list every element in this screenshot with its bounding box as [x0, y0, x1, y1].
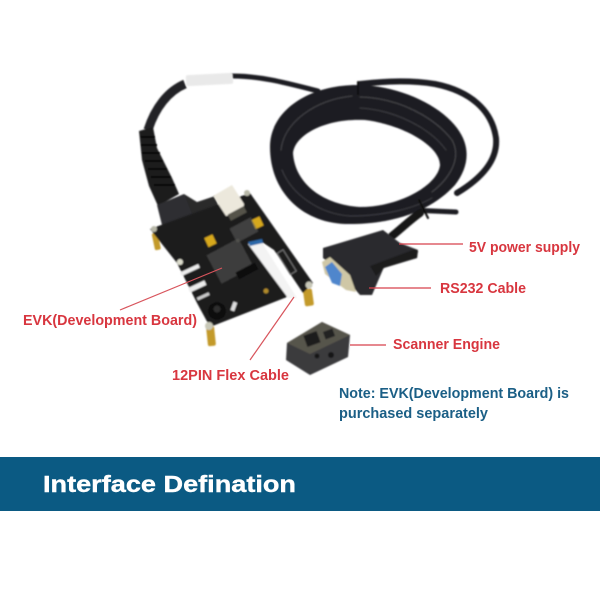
photo: DB9 serial connector: [322, 230, 418, 295]
label: 5V power supply: 5V power supply: [469, 240, 580, 256]
banner heading: Interface Defination: [43, 471, 296, 497]
usb connector: [213, 185, 244, 216]
leader line: RS232: [369, 287, 431, 289]
board standoffs: [152, 233, 314, 346]
photo: EVK development board: [150, 185, 314, 346]
photo: coiled RS232 cable: [233, 76, 496, 236]
photo: scanner engine module: [286, 322, 350, 375]
label: scanner engine: Scanner Engine: [393, 337, 500, 353]
leader line: EVK: [120, 268, 222, 310]
leader line: 5V power: [399, 243, 463, 245]
leader line: scanner engine: [350, 344, 386, 346]
leader line: flex cable: [250, 297, 294, 360]
label: EVK: EVK(Development Board): [23, 313, 197, 329]
note second line: purchased separately: [339, 406, 488, 422]
flex cable: [248, 241, 297, 298]
banner: [0, 457, 600, 511]
note: Note: EVK(Development Board) is: [339, 386, 569, 402]
photo: ribbed cable to development board: [139, 73, 233, 246]
label: 12PIN flex cable: 12PIN Flex Cable: [172, 368, 289, 384]
components: [151, 190, 312, 330]
label: RS232 cable: RS232 Cable: [440, 281, 526, 297]
